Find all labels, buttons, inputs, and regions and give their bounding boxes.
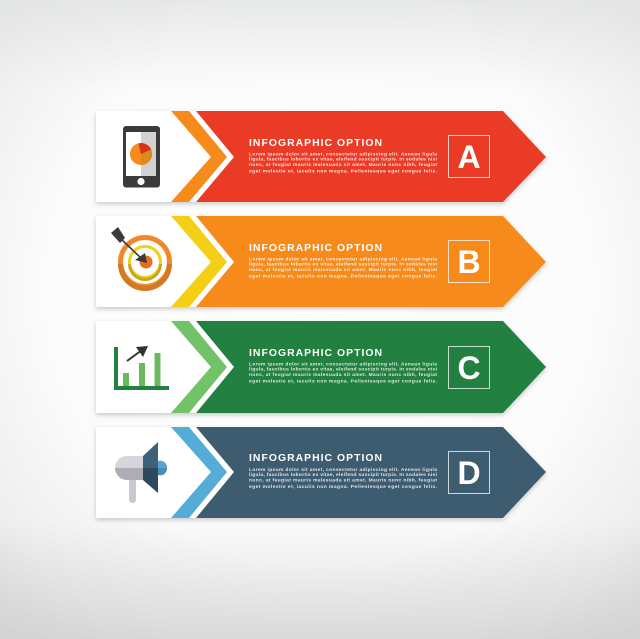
icon: growth chart — [114, 346, 169, 390]
chevron D — [171, 427, 227, 518]
panel: option D — [96, 427, 546, 518]
arrow banner D — [196, 427, 546, 518]
body text D: ligula, faucibus lobortis ex vitae, eleifend suscipit turpis. In sodales nisi — [249, 472, 438, 478]
body text A — [249, 152, 438, 174]
chevron C — [171, 321, 227, 413]
body text D — [249, 467, 438, 490]
chevron A — [171, 111, 227, 202]
white card C — [96, 321, 546, 413]
body text C: Lorem ipsum dolor sit amet, consectetur adipiscing elit. Aenean ligula — [249, 362, 437, 368]
arrow banner C — [196, 321, 546, 413]
body text C — [249, 362, 438, 384]
chevron B — [171, 216, 227, 307]
body text B: eget molestie et, iaculis non magna. Pellentesque eget congue felis. — [249, 274, 438, 280]
heading B: INFOGRAPHIC OPTION — [249, 243, 382, 254]
body text B — [249, 256, 438, 280]
letter box C — [448, 346, 490, 388]
white card A — [96, 111, 546, 202]
body text B: ligula, faucibus lobortis ex vitae, eleifend suscipit turpis. In sodales nisi — [249, 262, 438, 268]
letter box A — [448, 136, 490, 178]
body text A: nunc, at feugiat mauris malesuada sit amet. Mauris nunc nibh, feugiat — [249, 162, 437, 168]
body text C: nunc, at feugiat mauris malesuada sit amet. Mauris nunc nibh, feugiat — [249, 372, 437, 378]
panel: option B — [96, 216, 546, 307]
white card D — [96, 427, 546, 518]
body text B: Lorem ipsum dolor sit amet, consectetur adipiscing elit. Aenean ligula — [249, 256, 437, 262]
panel: option C — [96, 321, 546, 413]
body text D: nunc, at feugiat mauris malesuada sit amet. Mauris nunc nibh, feugiat — [249, 478, 437, 484]
heading D: INFOGRAPHIC OPTION — [249, 453, 382, 464]
body text C: eget molestie et, iaculis non magna. Pellentesque eget congue felis. — [249, 378, 438, 384]
arrow banner B — [196, 216, 546, 307]
icon: phone with pie chart — [123, 126, 160, 188]
heading C: INFOGRAPHIC OPTION — [249, 348, 382, 359]
heading A: INFOGRAPHIC OPTION — [249, 138, 382, 149]
icon: megaphone — [115, 442, 167, 503]
letter box D: D — [457, 455, 481, 491]
body text A: ligula, faucibus lobortis ex vitae, eleifend suscipit turpis. In sodales nisi — [249, 157, 438, 163]
icon: target with arrow — [111, 227, 172, 291]
letter box A: A — [457, 139, 481, 175]
body text C: ligula, faucibus lobortis ex vitae, eleifend suscipit turpis. In sodales nisi — [249, 367, 438, 373]
arrow banner A — [196, 111, 546, 202]
body text D: eget molestie et, iaculis non magna. Pellentesque eget congue felis. — [249, 484, 438, 490]
white card B — [96, 216, 546, 307]
letter box C: C — [457, 350, 481, 386]
letter box D — [448, 452, 490, 494]
body text D: Lorem ipsum dolor sit amet, consectetur adipiscing elit. Aenean ligula — [249, 467, 437, 473]
body text A: Lorem ipsum dolor sit amet, consectetur adipiscing elit. Aenean ligula — [249, 152, 437, 158]
letter box B — [448, 240, 490, 282]
letter box B: B — [457, 244, 481, 280]
body text B: nunc, at feugiat mauris malesuada sit amet. Mauris nunc nibh, feugiat — [249, 267, 437, 273]
body text A: eget molestie et, iaculis non magna. Pellentesque eget congue felis. — [249, 168, 438, 174]
panel: option A — [96, 111, 546, 202]
